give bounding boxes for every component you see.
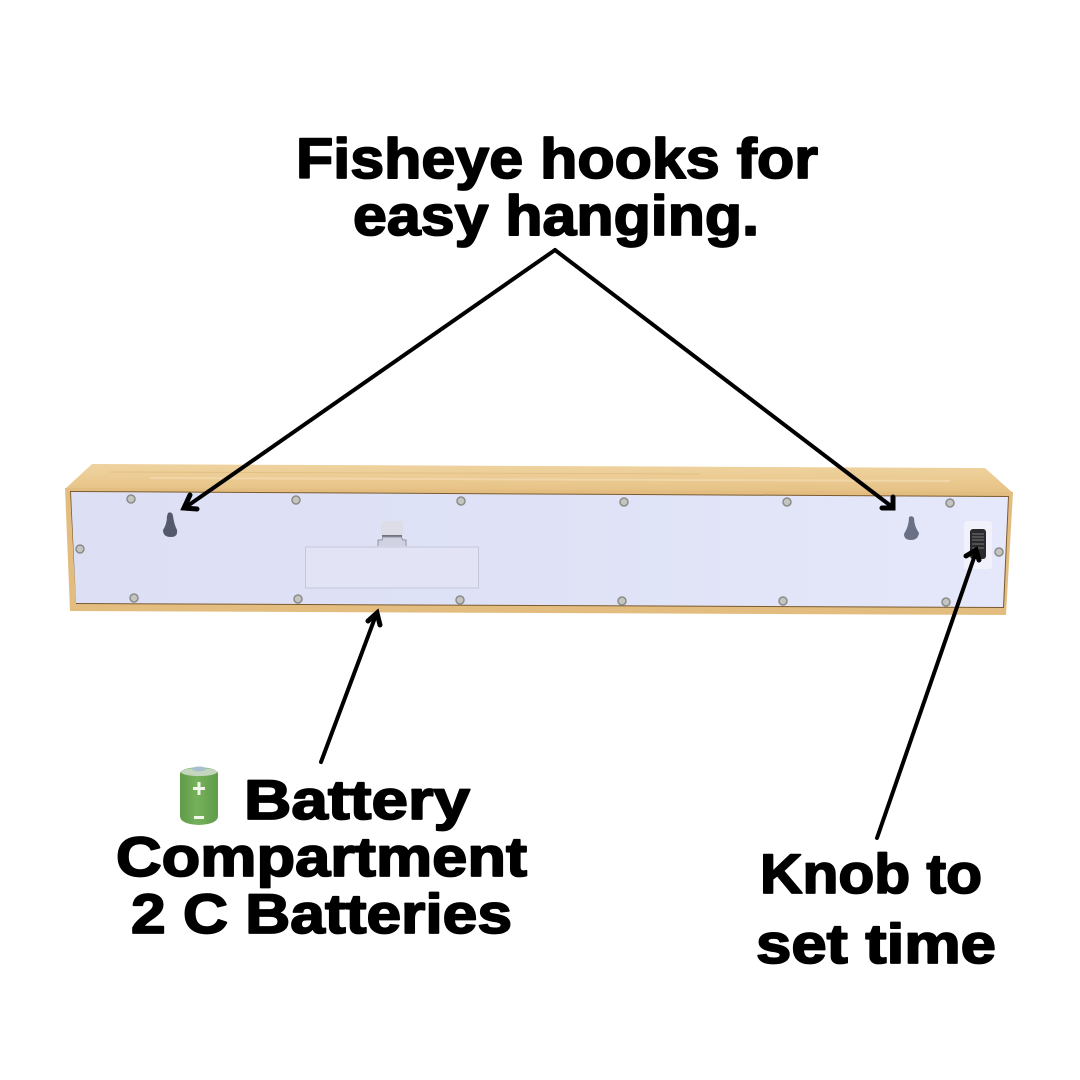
label: battery compartment: Battery (244, 768, 470, 831)
battery door (306, 521, 478, 588)
wood top face (65, 464, 1013, 493)
icon: right keyhole hook (904, 516, 919, 540)
label: knob to set time: set time (756, 912, 996, 975)
arrow: to right hook (555, 250, 893, 508)
icon: green battery (180, 766, 218, 825)
heading: fisheye hooks (296, 127, 818, 248)
heading: fisheye hooks: Fisheye hooks for (296, 127, 818, 191)
white back panel (70, 491, 1009, 608)
clock body: bamboo box seen from the back (65, 464, 1013, 615)
label: battery compartment: 2 C Batteries (131, 882, 512, 945)
label: knob to set time: Knob to (760, 842, 982, 905)
screws (76, 495, 1003, 606)
label: knob to set time (756, 842, 996, 975)
arrow: to battery compartment (321, 613, 380, 762)
wood front frame (65, 488, 1013, 615)
icon: left keyhole hook (163, 512, 177, 537)
arrow: to knob (877, 550, 979, 838)
arrow: to left hook (184, 250, 555, 509)
heading: fisheye hooks: easy hanging. (353, 184, 759, 248)
time-setting knob (964, 521, 992, 569)
label: battery compartment (116, 768, 527, 945)
label: battery compartment: Compartment (116, 825, 527, 888)
